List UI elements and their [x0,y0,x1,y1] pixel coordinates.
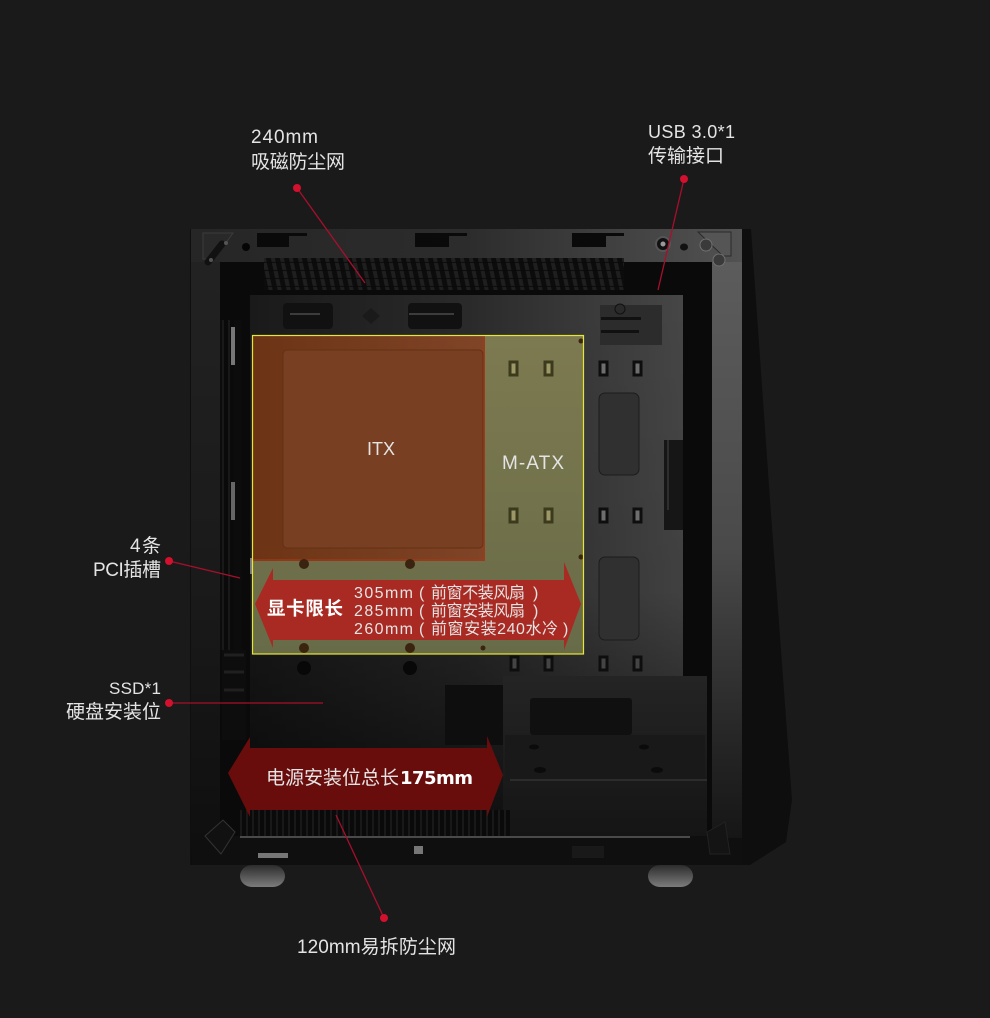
yellow outline [252,336,584,654]
right frame [712,229,742,865]
ITX edge [253,336,485,560]
arrow shape [228,736,503,817]
corner brackets [203,232,731,266]
computer case [190,229,792,887]
GPU length specifications: 285mm [354,603,413,620]
label: bottom dust filter: 120mm易拆防尘网 [297,936,456,958]
bottom dust filter [240,810,510,836]
case outer body [190,229,742,865]
plate screw holes [297,661,417,675]
label: SSD bay: 硬盘安装位 [66,701,161,723]
PSU shroud [445,676,707,836]
label: PCI slots: 4条 [130,535,161,557]
GPU length specifications [354,584,568,638]
arrow title: 显卡限长 [267,599,343,620]
GPU length specifications: ( [419,603,425,620]
ITX label: ITX [367,439,395,459]
lower left slots [222,650,246,740]
plate clips [511,362,641,670]
label: PCI slots: PCI插槽 [93,559,161,581]
back IO cutouts [283,303,662,345]
arrow value: 175mm [400,768,473,789]
callout lines [169,179,684,918]
label: PCI slots [93,535,161,581]
GPU length specifications: ) [533,603,538,620]
side cutouts on plate [599,393,639,640]
GPU length specifications: 260mm [354,621,413,638]
back plate [250,295,683,836]
motherboard zone: M-ATX [253,336,583,654]
label: SSD bay [66,679,161,723]
M-ATX mounting holes [510,362,552,522]
GPU length specifications: 前窗安装风扇 [431,602,525,620]
PSU length arrow [228,736,503,817]
GPU length specifications: 305mm [354,585,413,602]
interior dark [220,262,712,836]
label: SSD bay: SSD*1 [109,679,161,698]
top dust filter vent [264,258,624,295]
PCI slots [220,320,252,650]
GPU length specifications: ( [419,621,425,638]
callout dots [165,175,688,922]
top bar [191,229,742,262]
GPU length specifications: ( [419,585,425,602]
GPU length specifications: 前窗安装240水冷 [431,620,558,638]
motherboard zone: ITX [253,336,485,561]
ITX inset [283,350,483,548]
top slots [257,233,624,247]
feet [240,865,693,887]
arrow shape [255,562,581,650]
label: USB port [648,122,735,167]
GPU length specifications: ) [563,621,568,638]
label: top dust filter: 吸磁防尘网 [251,151,345,173]
label: top dust filter [251,127,345,173]
left frame [191,229,220,865]
bottom lip [192,820,742,865]
GPU length specifications: 前窗不装风扇 [431,584,525,602]
side glass panel [742,229,792,865]
M-ATX label: M-ATX [502,453,564,474]
label: top dust filter: 240mm [251,127,318,148]
label: USB port: 传输接口 [648,145,724,167]
label: USB port: USB 3.0*1 [648,122,735,142]
GPU length specifications: ) [533,585,538,602]
screw points [299,338,584,653]
GPU length arrow [255,562,581,650]
arrow text: 电源安装位总长 [266,767,399,789]
